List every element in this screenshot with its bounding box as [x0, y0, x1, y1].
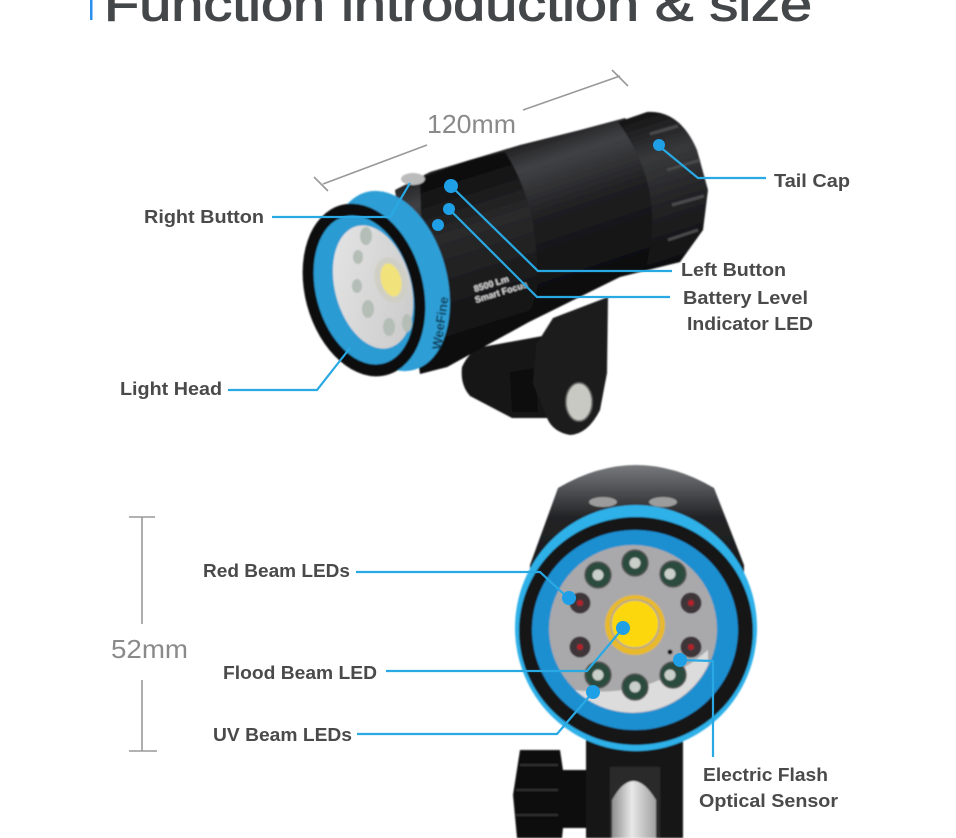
- top button: [401, 173, 425, 185]
- callout: light head: [120, 348, 350, 399]
- callout: flood beam LED: Flood Beam LED: [223, 663, 377, 683]
- dimension: 120mm: [314, 70, 628, 191]
- silver LED plate: [320, 216, 426, 358]
- clamp opening: [510, 368, 538, 412]
- illustration: dive light front view: [513, 465, 757, 838]
- callout: electric flash optical sensor: Optical Sensor: [699, 791, 838, 811]
- callout: electric flash optical sensor: [673, 653, 838, 811]
- illustration: dive light side view: [284, 112, 708, 435]
- callout: right button: Right Button: [144, 207, 264, 227]
- callout: light head: Light Head: [120, 379, 222, 399]
- optical sensor dot: [668, 650, 672, 654]
- top buttons: [589, 497, 677, 507]
- callout: flood beam LED: [223, 621, 630, 683]
- mount pole: [612, 781, 656, 838]
- UV LEDs: [585, 550, 686, 700]
- dimension: 120mm: 120mm: [427, 109, 516, 139]
- brand text: WeeFine: [429, 296, 451, 350]
- blue band: [311, 177, 469, 385]
- knurled grip: [420, 152, 537, 372]
- red LEDs: [570, 592, 702, 658]
- callout: battery level indicator: [443, 203, 813, 334]
- callout: battery level indicator: Battery Level: [683, 288, 808, 308]
- mount bracket: [586, 735, 683, 838]
- rear body: [530, 465, 744, 640]
- bracket opening: [610, 767, 660, 838]
- mount bolt: [566, 383, 592, 421]
- silver plate: [549, 545, 717, 713]
- plate highlight: [575, 650, 708, 713]
- callout: UV beam LEDs: UV Beam LEDs: [213, 725, 352, 745]
- tail cap ridges: [650, 126, 704, 240]
- inner blue ring: [532, 530, 738, 730]
- callout: UV beam LEDs: [213, 685, 600, 745]
- callout: tail cap: Tail Cap: [774, 171, 850, 191]
- flood LED: [605, 595, 665, 655]
- mount arm: [533, 297, 608, 435]
- callout: right button: [144, 183, 444, 231]
- yellow LED: [373, 257, 409, 303]
- dimension: 52mm: 52mm: [111, 634, 188, 664]
- mount clamp: [462, 335, 550, 418]
- outer blue ring: [515, 505, 757, 751]
- light body: [395, 118, 680, 374]
- callout: battery level indicator: Indicator LED: [687, 314, 813, 334]
- model text: 8500 Lm: [473, 274, 510, 294]
- knob: [513, 750, 586, 838]
- model subtext: Smart Focus: [474, 279, 529, 305]
- dimension: 52mm: [111, 517, 188, 751]
- tail cap: [618, 112, 708, 270]
- knob ridges: [516, 765, 558, 815]
- callout: left button: [444, 179, 786, 280]
- front bezel: [284, 190, 444, 390]
- black bezel: [519, 517, 753, 745]
- inner blue ring: [298, 204, 430, 376]
- callout: electric flash optical sensor: Electric Flash: [703, 765, 828, 785]
- callout: tail cap: [653, 139, 850, 191]
- callout: red beam LEDs: [203, 561, 576, 605]
- small LEDs: [352, 227, 412, 336]
- callout: left button: Left Button: [681, 260, 786, 280]
- callout: red beam LEDs: Red Beam LEDs: [203, 561, 350, 581]
